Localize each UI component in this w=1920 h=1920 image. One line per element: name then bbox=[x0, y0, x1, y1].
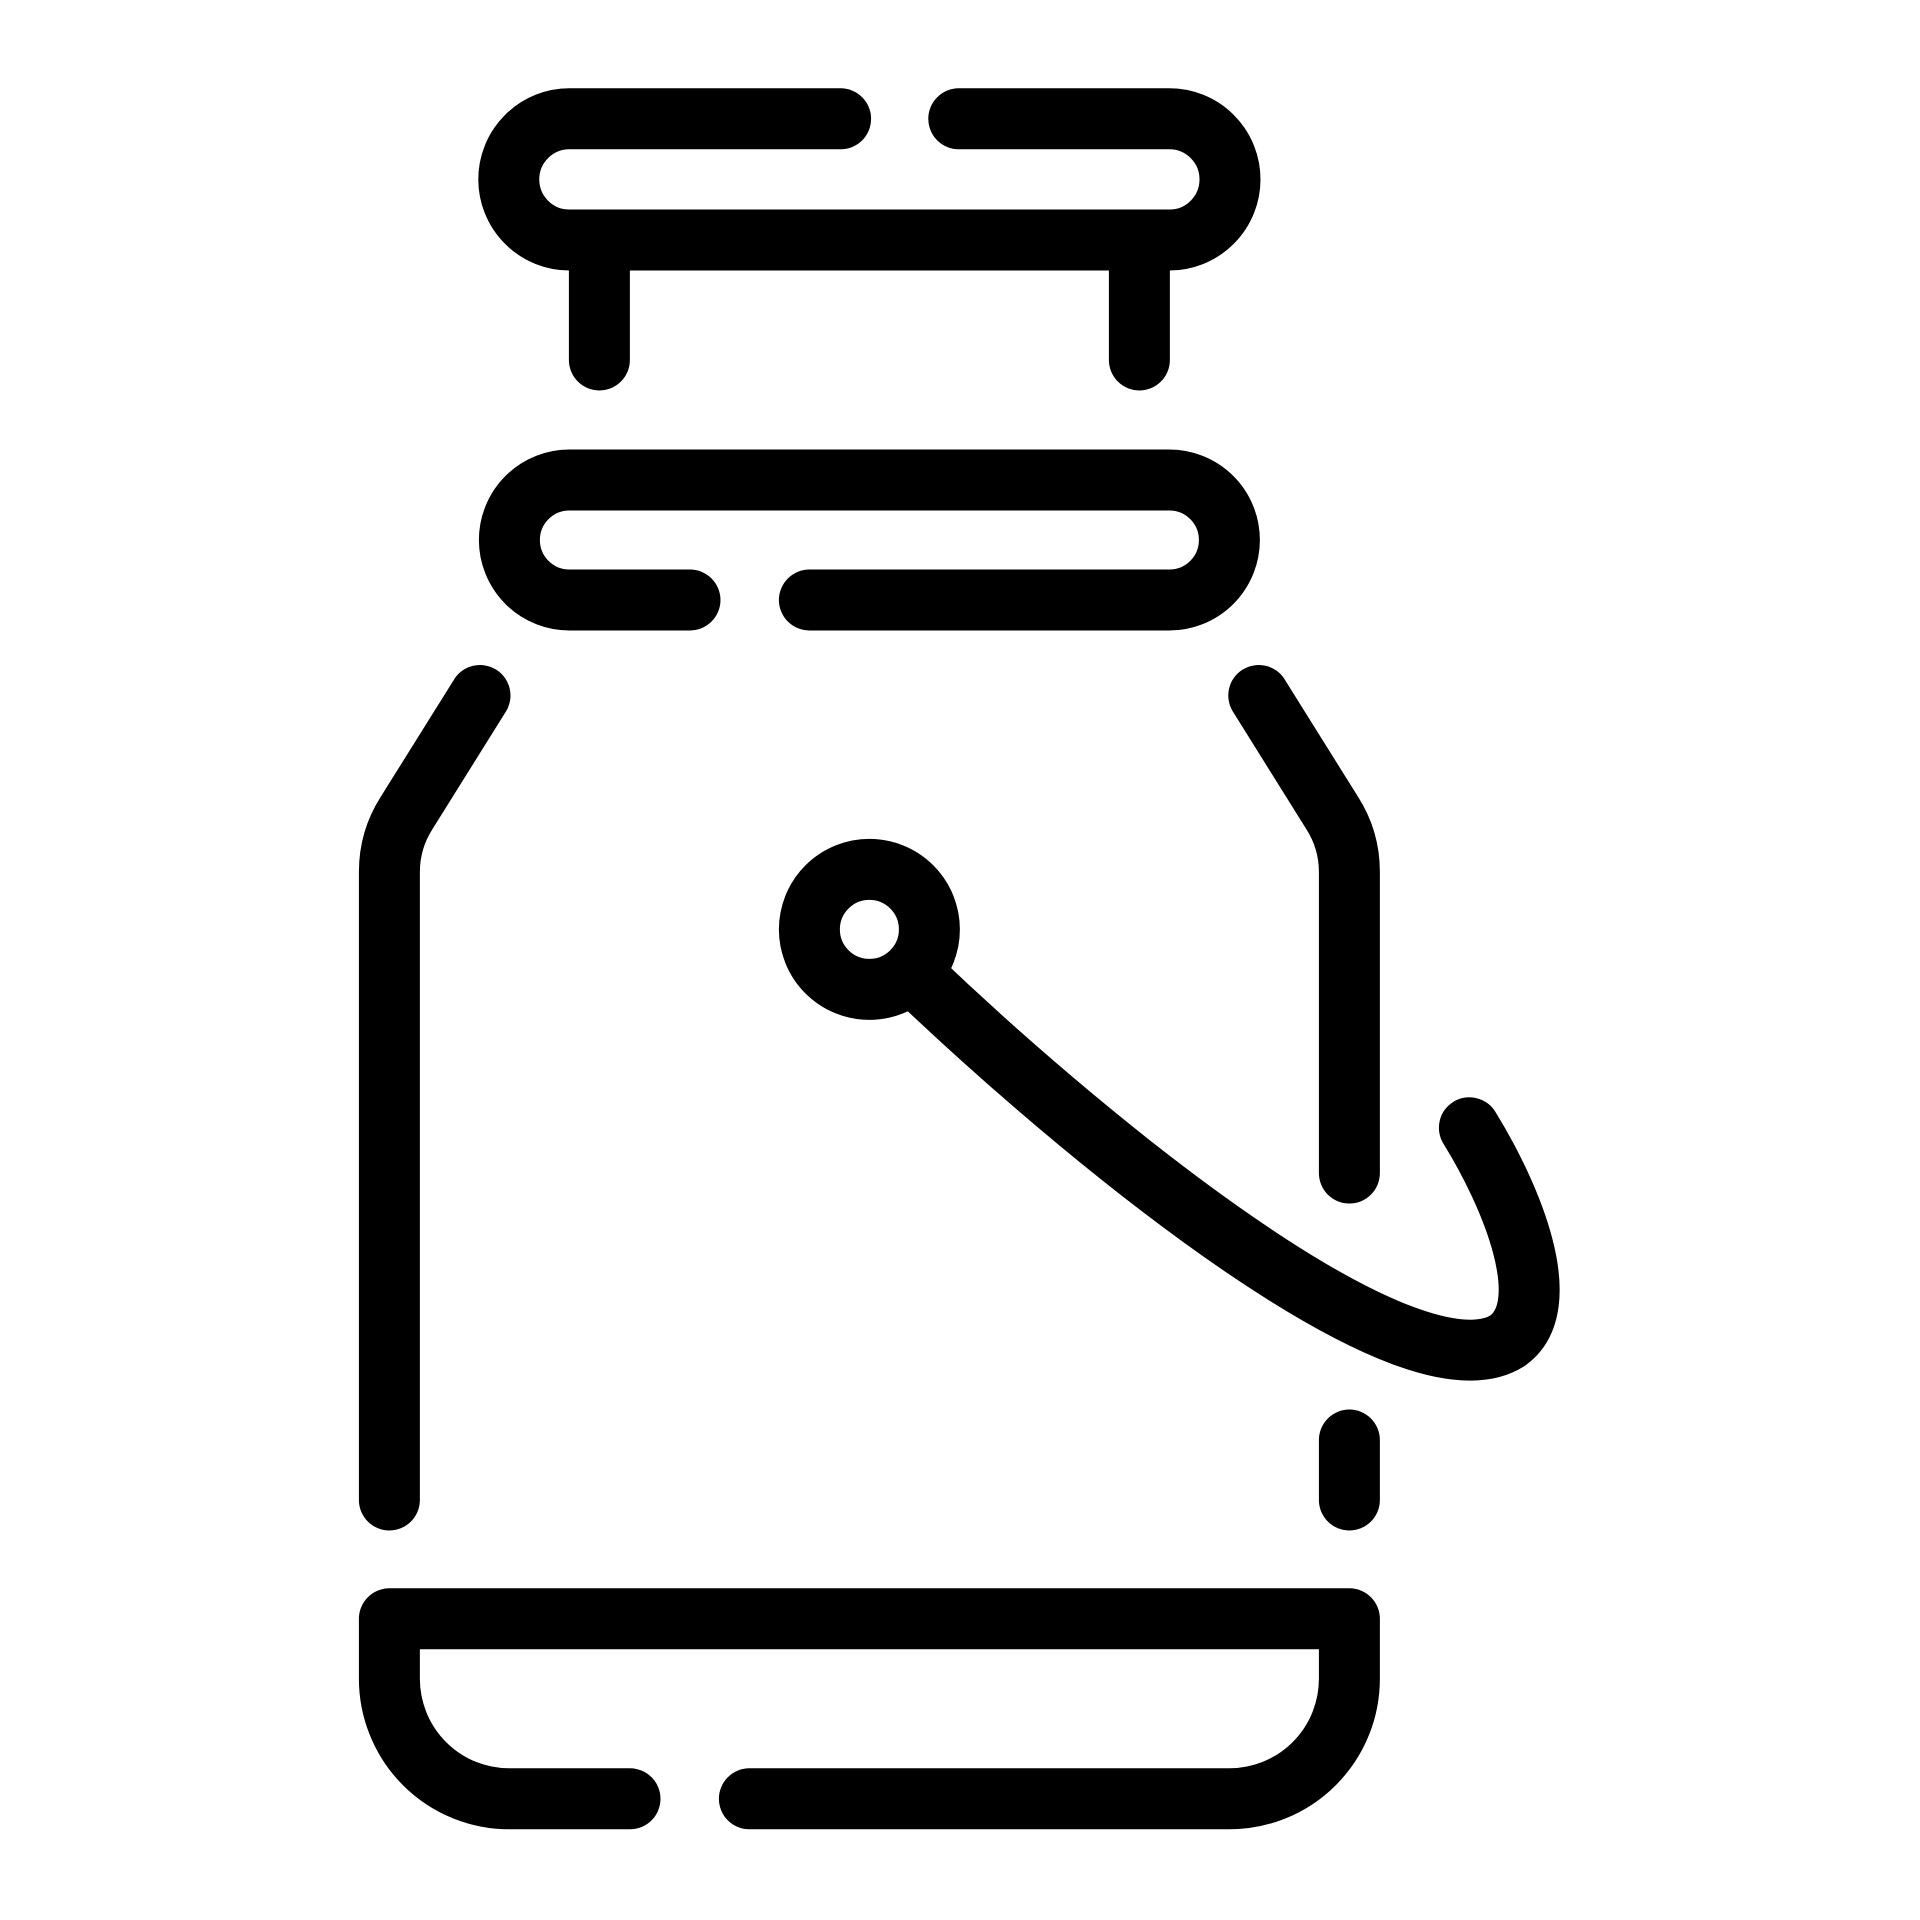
can body right side bbox=[1259, 696, 1349, 1500]
neck collar bbox=[509, 480, 1229, 600]
handle ring bbox=[809, 869, 929, 989]
can body left side bbox=[389, 696, 480, 1500]
lid top cap bbox=[509, 119, 1230, 360]
can base bbox=[389, 1619, 1349, 1799]
handle strap bbox=[912, 973, 1529, 1350]
